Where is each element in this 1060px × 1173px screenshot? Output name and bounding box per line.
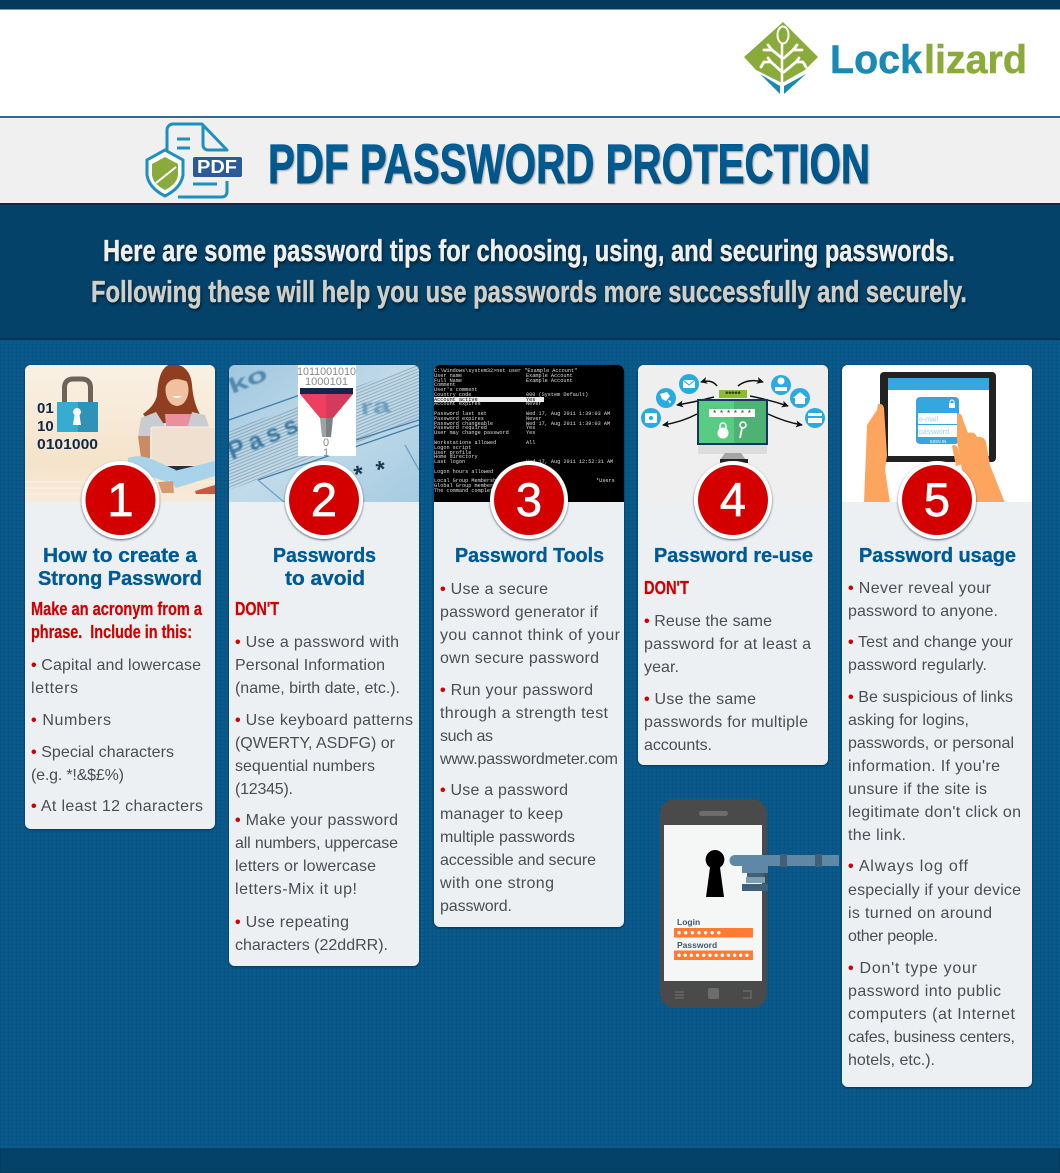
image: password field with funnel: 1 <box>323 447 329 459</box>
panel 2 tips: letters or lowercase <box>235 858 376 875</box>
image: command prompt: Wed 17, Aug 2011 1:39:03 AM <box>526 421 610 427</box>
image: command prompt: Password expires <box>434 416 484 422</box>
login form: Password <box>677 940 717 950</box>
panel 5 tips: passwords, or personal <box>848 735 1014 752</box>
image: command prompt: Full Name <box>434 378 462 384</box>
image: command prompt: Account active <box>434 397 478 403</box>
panel 2 tips: sequential numbers <box>235 758 375 775</box>
phone screen <box>664 825 762 981</box>
panel 1 tips <box>31 657 203 815</box>
panel 2 heading <box>273 545 376 590</box>
image: command prompt: Yes <box>526 430 535 436</box>
panel 2 tips: letters-Mix it up! <box>235 881 357 898</box>
panel 4 tips: accounts. <box>644 737 712 754</box>
panel 5 tips: • Be suspicious of links <box>848 689 1013 706</box>
image: command prompt: Wed 17, Aug 2011 12:52:31 AM <box>526 459 613 465</box>
panel 4 tips: password for at least a <box>644 636 811 653</box>
image: password field with funnel: 1011001010 <box>297 366 356 378</box>
number badge 5 <box>898 461 976 539</box>
panel 3 tips: • Use a password <box>440 782 568 799</box>
number badge 3: 3 <box>516 473 542 526</box>
panel 3 tips: accessible and secure <box>440 852 596 869</box>
icon: PDF document with shield <box>147 124 242 197</box>
panel 4 tips: year. <box>644 659 679 676</box>
number badge 4 <box>694 461 772 539</box>
image: hands holding tablet: SIGN IN <box>930 439 946 444</box>
image: password field with funnel: ra <box>359 394 392 420</box>
image: command prompt: All <box>526 440 535 446</box>
image: command prompt: Yes <box>526 397 535 403</box>
panel 5 tips: • Always log off <box>848 858 969 875</box>
panel 5 tips: password into public <box>848 983 1001 1000</box>
image: command prompt: Wed 17, Aug 2011 1:39:03 AM <box>526 411 610 417</box>
panel 4 tips <box>644 613 811 754</box>
panel 1 tips: (e.g. *!&$£%) <box>31 767 124 784</box>
panel 1 red lead: Make an acronym from a <box>31 598 203 619</box>
panel 1 red lead <box>31 598 203 642</box>
image: command prompt: Yes <box>526 425 535 431</box>
panel 3 tips: password generator if <box>440 604 599 621</box>
image: command prompt: Home directory <box>434 454 478 460</box>
image: hands holding tablet: password <box>919 429 949 436</box>
panel 5 tips: other people. <box>848 928 938 945</box>
panel 5 tips: cafes, business centers, <box>848 1029 1015 1046</box>
panel 1 red lead: phrase. Include in this: <box>31 621 192 642</box>
image: command prompt: Password required <box>434 425 487 431</box>
image: hands holding tablet: e-mail <box>919 416 939 424</box>
panel 5 tips <box>848 580 1021 1069</box>
image: command prompt: Password last set <box>434 411 487 417</box>
panel 5 tips: asking for logins, <box>848 712 969 729</box>
panel 2 tips: • Make your password <box>235 812 398 829</box>
phone body <box>660 799 767 1008</box>
login form: •••••••••••• <box>677 948 749 962</box>
icon: lizard diamond <box>744 22 818 94</box>
number badge 3 <box>490 461 568 539</box>
title band <box>0 118 1060 205</box>
panel 3 heading: Password Tools <box>455 545 604 567</box>
image: monitor linked to account icons: ****** <box>713 409 751 418</box>
login form <box>674 917 753 962</box>
image: command prompt: Logon hours allowed <box>434 469 493 475</box>
panel 3 tips: manager to keep <box>440 806 563 823</box>
panel 5 tips: hotels, etc.). <box>848 1052 935 1069</box>
panel 3 tips: • Run your password <box>440 682 593 699</box>
image: command prompt: User name <box>434 373 462 379</box>
panel 2 tips: characters (22ddRR). <box>235 937 388 954</box>
image: password field with funnel: 1000101 <box>305 376 348 388</box>
panel 2 heading: to avoid <box>285 568 365 590</box>
image: command prompt: Comment <box>434 382 456 388</box>
panel 1 tips: • At least 12 characters <box>31 798 203 815</box>
image: monitor linked to account icons <box>638 365 828 463</box>
panel: 2 passwords to avoid <box>223 362 419 966</box>
image: command prompt: *Users <box>596 478 615 484</box>
image: command prompt: Workstations allowed <box>434 440 496 446</box>
image: command prompt: User profile <box>434 450 471 456</box>
image: password field with funnel: ** <box>352 456 389 489</box>
panel 3 tips <box>439 581 621 915</box>
image: command prompt: Global Group memberships <box>434 483 509 489</box>
panel 5 tips: especially if your device <box>848 882 1021 899</box>
panel 3 tips: • Use a secure <box>440 581 548 598</box>
panel 5 tips: computers (at Internet <box>848 1006 1016 1023</box>
panel 1 heading: How to create a <box>43 545 198 567</box>
panel 1 tips: letters <box>31 680 78 697</box>
panel 4 heading: Password re-use <box>654 545 813 567</box>
login form: ••••••• <box>677 926 721 940</box>
panel: 4 password re-use <box>638 365 828 765</box>
panel: 3 password tools <box>434 365 624 927</box>
logo band <box>0 9 1060 118</box>
panel 5 tips: • Test and change your <box>848 634 1014 651</box>
number badge 4: 4 <box>720 473 746 526</box>
illustration: phone with key <box>660 799 839 1008</box>
panel 5 heading: Password usage <box>859 545 1016 567</box>
image: woman with laptop and padlock: 01 <box>37 400 54 417</box>
image: command prompt: Example Account <box>526 373 573 379</box>
panel 2 DON'T: DON'T <box>235 598 280 619</box>
image: command prompt: Never <box>526 416 542 422</box>
icon: PDF document with shield: PDF <box>197 157 237 177</box>
image: command prompt: Example Account <box>526 378 573 384</box>
panel 5 tips: the link. <box>848 827 906 844</box>
panel 4 tips: • Use the same <box>644 691 756 708</box>
image: command prompt <box>434 365 624 503</box>
image: command prompt: Account expires <box>434 401 481 407</box>
panel 3 tips: own secure password <box>440 650 599 667</box>
image: command prompt: Password changeable <box>434 421 493 427</box>
panel 5 tips: information. If you're <box>848 758 1000 775</box>
panel 2 tips: (name, birth date, etc.). <box>235 680 400 697</box>
image: woman with laptop and padlock: 0101000 <box>37 436 98 453</box>
panel 3 tips: such as <box>440 728 493 745</box>
number badge 1 <box>82 461 160 539</box>
panel 1 tips: • Capital and lowercase <box>31 657 201 674</box>
image: command prompt: Never <box>526 401 542 407</box>
image: woman with laptop and padlock: 10 <box>37 418 54 435</box>
image: password field with funnel <box>223 362 419 503</box>
image: command prompt: User's comment <box>434 387 478 393</box>
panel 3 tips: www.passwordmeter.com <box>439 751 618 768</box>
image: command prompt: Country code <box>434 392 471 398</box>
panel 2 tips: • Use keyboard patterns <box>235 712 413 729</box>
panel 1 tips: • Numbers <box>31 712 111 729</box>
panel 3 tips: multiple passwords <box>440 829 575 846</box>
panel 3 tips: password. <box>440 898 512 915</box>
panel 3 tips: you cannot think of your <box>440 627 621 644</box>
panel 2 tips <box>235 634 413 954</box>
wordmark <box>830 38 1027 82</box>
footer band <box>0 1149 1060 1173</box>
panel 1 heading <box>38 545 202 590</box>
image: command prompt: C:\Windows\system32>net user "Example Account" <box>434 368 577 374</box>
panel 5 tips: • Don't type your <box>848 960 978 977</box>
image: command prompt: 000 (System Default) <box>526 392 588 398</box>
number badge 2: 2 <box>311 473 337 526</box>
top bar <box>0 0 1060 10</box>
panel 2 tips: • Use repeating <box>235 914 349 931</box>
panel 2 tips: Personal Information <box>235 657 385 674</box>
image: password field with funnel: 0 <box>323 437 329 449</box>
panel 2 tips: (12345). <box>235 781 293 798</box>
image: hands holding tablet <box>842 365 1032 503</box>
logo: Locklizard <box>744 22 1027 94</box>
image: password field with funnel: Pass <box>223 411 302 466</box>
panel 5 tips: unsure if the site is <box>848 781 987 798</box>
panel 2 tips: • Use a password with <box>235 634 399 651</box>
panel 5 tips: legitimate don't click on <box>848 804 1021 821</box>
image: command prompt: Local Group Memberships <box>434 478 506 484</box>
panel 5 tips: password regularly. <box>848 657 987 674</box>
panel 5 tips: password to anyone. <box>848 603 998 620</box>
panel 2 tips: (QWERTY, ASDFG) or <box>235 735 396 752</box>
panel 4 tips: passwords for multiple <box>644 714 808 731</box>
panel 5 tips: • Never reveal your <box>848 580 992 597</box>
image: monitor linked to account icons: ***** <box>725 390 742 399</box>
panel: 1 strong password <box>25 364 217 829</box>
wordmark: Lock <box>830 38 923 82</box>
panel 2 tips: all numbers, uppercase <box>235 835 398 852</box>
panel 4 tips: • Reuse the same <box>644 613 772 630</box>
panel 4 DON'T: DON'T <box>644 577 690 598</box>
number badge 1: 1 <box>107 473 134 526</box>
image: command prompt: The command completed <box>434 488 499 494</box>
image: woman with laptop and padlock <box>25 364 217 503</box>
panel: 5 password usage <box>842 365 1032 1087</box>
number badge 2 <box>285 461 363 539</box>
panel 1 tips: • Special characters <box>31 744 174 761</box>
wordmark: lizard <box>924 38 1027 82</box>
panel 1 heading: Strong Password <box>38 568 202 590</box>
keyhole <box>706 850 724 897</box>
image: command prompt: Last logon <box>434 459 465 465</box>
panel 3 tips: with one strong <box>439 875 554 892</box>
image: command prompt: Logon script <box>434 445 471 451</box>
panel 3 tips: through a strength test <box>440 705 609 722</box>
image: command prompt: User may change password <box>434 430 509 436</box>
key <box>730 854 839 891</box>
panel 5 tips: is turned on around <box>848 905 992 922</box>
number badge 5: 5 <box>924 473 950 526</box>
login form: Login <box>677 917 700 927</box>
intro band <box>0 205 1060 340</box>
panel 2 heading: Passwords <box>273 545 376 567</box>
image: password field with funnel: ko <box>225 362 271 399</box>
